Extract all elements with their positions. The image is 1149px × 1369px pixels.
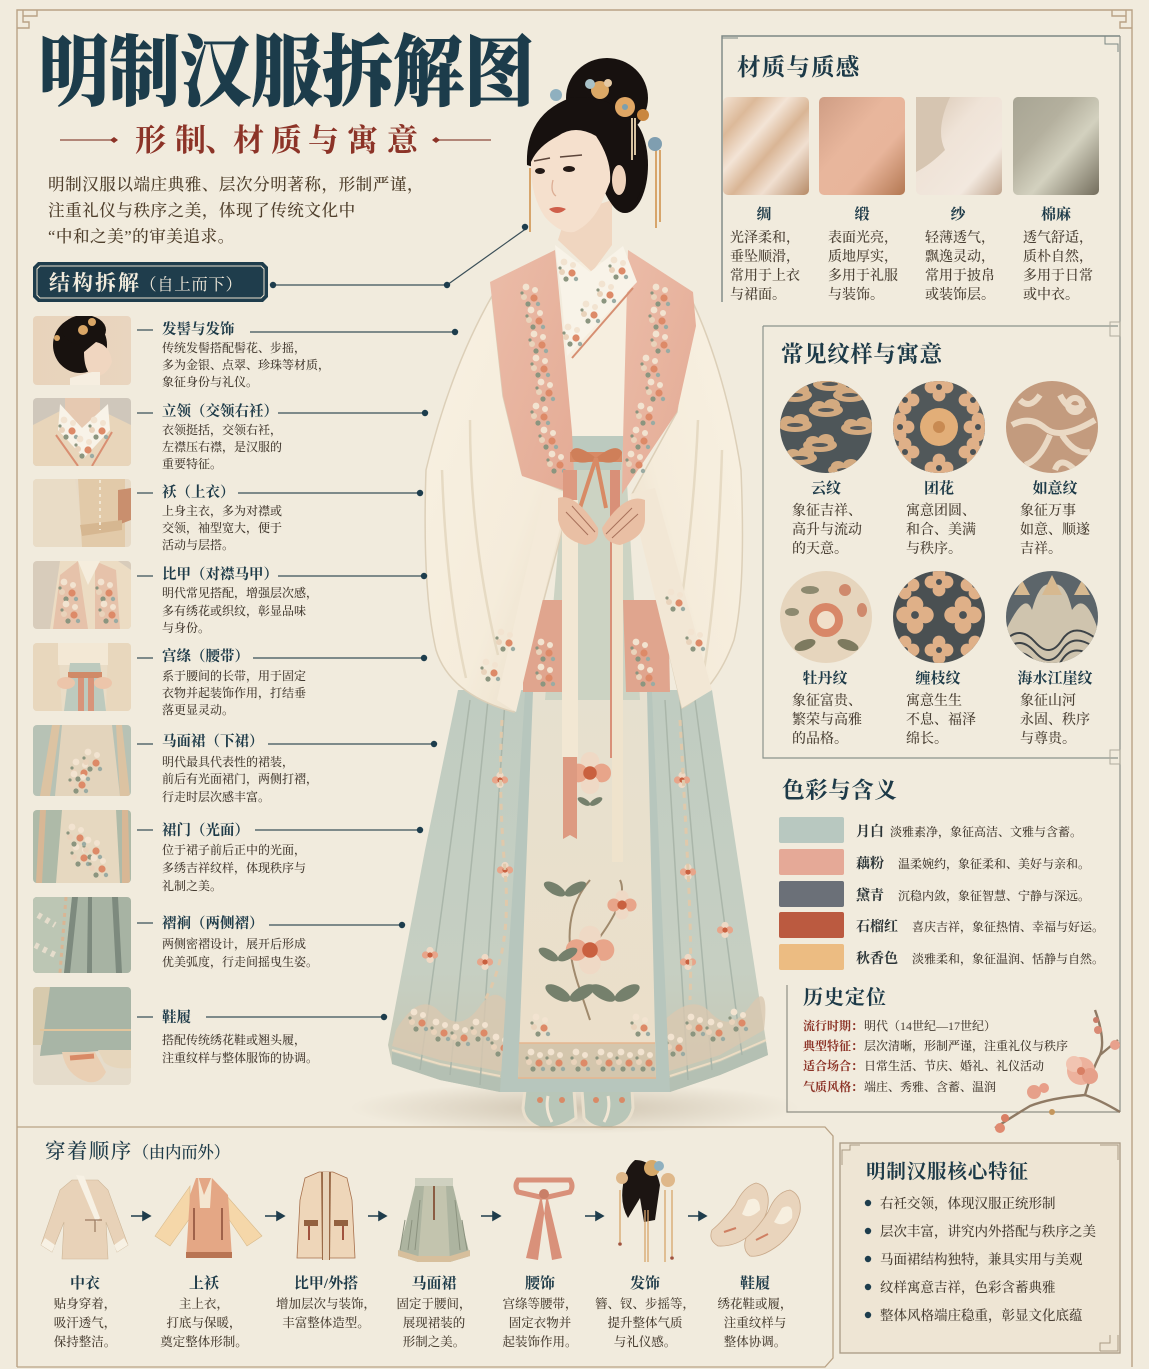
material: gauze: 常用于披帛 [925,267,995,284]
step: waist ornament: 起装饰作用。 [502,1334,578,1349]
pattern: cloud: 象征吉祥、 [792,502,862,519]
arrow [585,1212,603,1220]
panel: patterns [763,36,1120,1112]
row: collar: 衣领挺括，交领右衽， [162,422,282,437]
material: cotton linen [1013,97,1099,303]
subtitle with side ornaments [60,123,491,158]
heading: 常见纹样与寓意 [781,341,944,367]
step: shoes: 绣花鞋或履， [717,1296,793,1311]
pattern: peony: 象征富贵、 [792,692,862,709]
step: upper jacket: 上袄 [189,1275,219,1292]
row: shoes: 搭配传统绣花鞋或翘头履， [162,1032,306,1047]
pattern: cloud: 高升与流动 [792,521,862,538]
row: upper garment: 袄（上衣） [162,484,234,501]
colour: autumn incense [779,944,1104,970]
arrow [688,1212,706,1220]
pattern: sea and cliff [1006,571,1098,747]
pattern: cloud [780,381,872,554]
row: mamian skirt: 行走时层次感丰富。 [162,789,270,804]
material: gauze: 轻薄透气， [925,229,995,246]
material: silk: 与裙面。 [730,287,786,303]
row: shoes: 鞋履 [162,1008,191,1026]
panel: history: 明代（14世纪—17世纪） [864,1018,996,1033]
row: waist sash: 系于腰间的长带，用于固定 [162,668,306,683]
panel: dressing order [17,1127,833,1367]
pattern: medallion: 与秩序。 [906,541,962,557]
intro paragraph: “中和之美”的审美追求。 [48,227,235,246]
row: vest: 多有绣花或织纹，彰显品味 [162,603,306,618]
step: waist ornament: 腰饰 [525,1274,555,1292]
row: mamian skirt: 明代最具代表性的裙装， [162,754,294,769]
panel: history: 层次清晰，形制严谨，注重礼仪与秩序 [864,1038,1068,1053]
icon: sash [516,1180,572,1260]
pattern: scroll vine: 不息、福泽 [906,711,976,728]
material: gauze: 纱 [950,205,967,223]
material: satin: 表面光亮， [828,229,898,246]
step: inner robe: 保持整洁。 [54,1334,116,1349]
step: mamian skirt [396,1178,472,1349]
row: pleats: 两侧密褶设计，展开后形成 [162,936,306,951]
row: upper garment: 活动与层搭。 [162,537,234,552]
step: waist ornament: 固定衣物并 [509,1315,572,1330]
heading: 色彩与含义 [782,778,898,803]
colour: lotus pink [779,849,1090,875]
panel: history: 日常生活、节庆、婚礼、礼仪活动 [864,1058,1044,1073]
step: vest: 比甲/外搭 [294,1274,358,1292]
pattern: ruyi: 如意纹 [1032,479,1078,497]
intro paragraph: 明制汉服以端庄典雅、层次分明著称，形制严谨， [48,174,424,194]
title: 明制汉服拆解图 [38,31,535,117]
section badge: structure: （自上而下） [140,275,243,294]
arrow [481,1212,500,1220]
heading: 材质与质感 [737,54,861,81]
colour: lotus pink: 藕粉 [856,855,884,872]
row: collar: 左襟压右襟，是汉服的 [162,439,282,454]
row: collar [33,398,428,471]
row: shoes: 注重纹样与整体服饰的协调。 [162,1050,318,1065]
icon: inner robe [41,1175,128,1259]
icon: mamian skirt [398,1178,470,1262]
panel: colours [779,778,1104,970]
row: vest: 比甲（对襟马甲） [162,565,278,583]
row: vest: 明代常见搭配，增强层次感， [162,585,318,600]
row: mamian skirt: 马面裙（下裙） [162,732,264,750]
panel: history [787,985,1120,1112]
colour: dark teal grey: 黛青 [856,887,884,904]
step: hair ornament: 与礼仪感。 [614,1334,676,1349]
step: upper jacket: 主上衣， [179,1296,229,1311]
pattern: ruyi: 象征万事 [1020,502,1076,519]
front panel of skirt [500,692,670,1092]
material: gauze: 或装饰层。 [925,286,995,303]
material: cotton linen: 质朴自然， [1023,248,1093,265]
row: hair: 象征身份与礼仪。 [162,374,258,389]
section badge: structure [33,262,268,302]
shoes [523,1090,633,1128]
hair ornaments [530,79,662,232]
pattern: medallion: 团花 [924,479,954,497]
feature list: 整体风格端庄稳重，彰显文化底蕴 [880,1307,1083,1324]
material: gauze [916,97,1002,303]
feature list [865,1195,1096,1324]
row: pleats: 优美弧度，行走间摇曳生姿。 [162,954,318,969]
material: satin [819,97,905,303]
row: upper garment: 交领，袖型宽大，便于 [162,520,282,535]
material: silk: 垂坠顺滑， [730,248,800,265]
waist sash bow and tails [562,448,623,862]
pattern: scroll vine: 缠枝纹 [915,669,961,687]
material: cotton linen: 透气舒适， [1023,229,1093,246]
material: satin: 多用于礼服 [828,268,898,284]
row: hair: 多为金银、点翠、珍珠等材质， [162,357,330,372]
front panel embroidery [530,752,650,1037]
colour: pomegranate red [779,912,1104,938]
icon: vest [297,1172,355,1260]
intro paragraph: 注重礼仪与秩序之美，体现了传统文化中 [48,201,356,220]
leader line to figure [270,224,528,288]
panel: core features [840,1143,1120,1353]
pattern: sea and cliff: 与尊贵。 [1020,730,1076,747]
structure rows [33,315,458,1085]
row: collar: 立领（交领右衽） [162,402,278,420]
pattern: medallion [893,381,985,554]
row: skirt front panel [33,810,423,893]
colour: dark teal grey: 沉稳内敛，象征智慧、宁静与深远。 [898,888,1090,903]
row: upper garment: 上身主衣，多为对襟或 [162,503,282,518]
colour: pomegranate red: 石榴红 [856,918,898,935]
section badge: structure: 结构拆解 [49,271,141,295]
step: upper jacket: 奠定整体形制。 [160,1334,248,1349]
subtitle with side ornaments: 形制、材质与寓意 [135,123,420,158]
row: skirt front panel: 礼制之美。 [162,878,222,893]
step: mamian skirt: 形制之美。 [403,1334,465,1349]
material: silk [723,97,809,303]
pattern: cloud: 的天意。 [792,541,848,557]
feature list: 纹样寓意吉祥，色彩含蓄典雅 [880,1279,1056,1296]
row: skirt front panel: 多绣吉祥纹样，体现秩序与 [162,860,306,875]
heading: 明制汉服核心特征 [866,1161,1029,1183]
pattern: scroll vine [891,568,989,747]
step: waist ornament: 宫绦等腰带， [502,1296,578,1311]
pattern: medallion: 寓意团圆、 [906,503,976,519]
hands [558,497,645,545]
main figure: woman in Ming hanfu [350,58,800,1134]
sleeves [425,296,742,712]
skirt side embroidery band [392,720,765,1074]
panel: materials [722,36,1120,303]
step: hair ornament: 发饰 [630,1274,660,1292]
step: upper jacket [155,1176,262,1349]
colour: lotus pink: 温柔婉约，象征柔和、美好与亲和。 [898,856,1090,871]
plum blossom branch [995,1010,1120,1133]
row: vest: 与身份。 [162,620,210,635]
icon: upper jacket [155,1176,262,1258]
arrow [368,1212,386,1220]
step: vest [276,1172,376,1330]
step: vest: 丰富整体造型。 [282,1315,370,1330]
material: cotton linen: 或中衣。 [1023,286,1079,303]
icon: shoes [711,1183,800,1256]
feature list: 马面裙结构独特，兼具实用与美观 [880,1251,1083,1268]
row: skirt front panel: 裙门（光面） [162,821,249,839]
row: waist sash: 衣物并起装饰作用，打结垂 [162,685,306,700]
material: cotton linen: 多用于日常 [1023,267,1093,284]
step: inner robe [41,1175,128,1349]
material: satin: 质地厚实， [828,248,898,265]
step: shoes: 整体协调。 [724,1334,786,1349]
panel: history: 典型特征： [803,1038,863,1053]
under robe [560,262,632,436]
row: pleats: 褶裥（两侧褶） [162,914,264,932]
step: inner robe: 吸汗透气， [54,1315,116,1330]
material: satin: 缎 [854,205,870,223]
step: shoes: 鞋履 [740,1274,770,1292]
arrow [265,1212,284,1220]
feature list: 右衽交领，体现汉服正统形制 [880,1195,1056,1212]
upper skirt and waist band [545,433,640,700]
row: waist sash [33,643,427,717]
pattern: sea and cliff: 永固、秩序 [1020,712,1090,728]
step: inner robe: 中衣 [70,1275,100,1292]
pattern: peony: 牡丹纹 [802,670,848,687]
row: hair: 发髻与发饰 [162,320,235,338]
row: collar: 重要特征。 [162,456,222,471]
step: mamian skirt: 展现裙装的 [403,1315,465,1330]
panel: history: 气质风格： [803,1079,863,1094]
row: waist sash: 落更显灵动。 [162,702,234,717]
step: vest: 增加层次与装饰， [276,1296,376,1311]
colour: dark teal grey [779,881,1090,907]
colour: moon white: 月白 [856,823,884,840]
icon: hair ornament [616,1160,675,1262]
panel: history: 适合场合： [803,1058,863,1073]
neck [558,200,612,272]
row: hair: 传统发髻搭配髻花、步摇， [162,340,306,355]
row: mamian skirt: 前后有光面裙门，两侧打褶， [162,771,318,786]
heading: 穿着顺序（由内而外） [45,1140,230,1163]
step: upper jacket: 打底与保暖， [166,1315,242,1330]
pattern: sea and cliff: 海水江崖纹 [1017,669,1093,687]
row: pleats [33,897,405,973]
step: hair ornament [595,1160,695,1349]
row: vest [33,561,427,635]
pattern: peony [780,571,872,747]
pattern: scroll vine: 寓意生生 [906,692,962,709]
pattern: sea and cliff: 象征山河 [1020,693,1076,709]
vest [480,250,712,712]
row: shoes [33,987,387,1085]
material: silk: 光泽柔和， [730,229,800,246]
step: waist ornament [502,1180,578,1349]
row: skirt front panel: 位于裙子前后正中的光面， [162,842,306,857]
step: mamian skirt: 固定于腰间， [396,1296,472,1311]
intro paragraph [48,174,424,246]
colour: moon white: 淡雅素净，象征高洁、文雅与含蓄。 [890,824,1082,839]
step: shoes: 注重纹样与 [724,1315,786,1330]
panel: history: 流行时期： [803,1018,863,1033]
feature list: 层次丰富，讲究内外搭配与秩序之美 [880,1223,1096,1240]
colour: pomegranate red: 喜庆吉祥，象征热情、幸福与好运。 [912,919,1104,934]
pattern: peony: 繁荣与高雅 [792,712,862,728]
step: shoes [711,1183,800,1349]
step: mamian skirt: 马面裙 [411,1274,457,1292]
hair and head [527,58,648,232]
step: hair ornament: 簪、钗、步摇等， [595,1296,695,1311]
row: mamian skirt [33,725,437,804]
row: upper garment [33,479,423,552]
skirt [388,690,768,1092]
pattern: scroll vine: 绵长。 [906,731,948,747]
row: waist sash: 宫绦（腰带） [162,647,249,665]
arrow [131,1212,150,1220]
material: satin: 与装饰。 [828,286,884,303]
colour: autumn incense: 淡雅柔和，象征温润、恬静与自然。 [912,951,1104,966]
material: gauze: 飘逸灵动， [925,248,995,265]
step: hair ornament: 提升整体气质 [607,1315,683,1330]
heading: 历史定位 [803,986,887,1009]
material: silk: 绸 [756,205,772,223]
colour: autumn incense: 秋香色 [856,950,898,967]
cross collar [555,245,637,358]
pattern: cloud: 云纹 [811,480,841,497]
material: silk: 常用于上衣 [730,267,800,284]
material: cotton linen: 棉麻 [1041,205,1071,223]
pattern: medallion: 和合、美满 [906,521,976,538]
panel: history: 端庄、秀雅、含蓄、温润 [864,1079,996,1094]
row: hair [33,315,458,389]
pattern: ruyi: 如意、顺遂 [1020,522,1091,538]
colour: moon white [779,817,1082,843]
step: inner robe: 贴身穿着， [54,1296,116,1311]
pattern: peony: 的品格。 [792,730,848,747]
pattern: ruyi [1006,381,1098,557]
pattern: ruyi: 吉祥。 [1020,540,1062,557]
